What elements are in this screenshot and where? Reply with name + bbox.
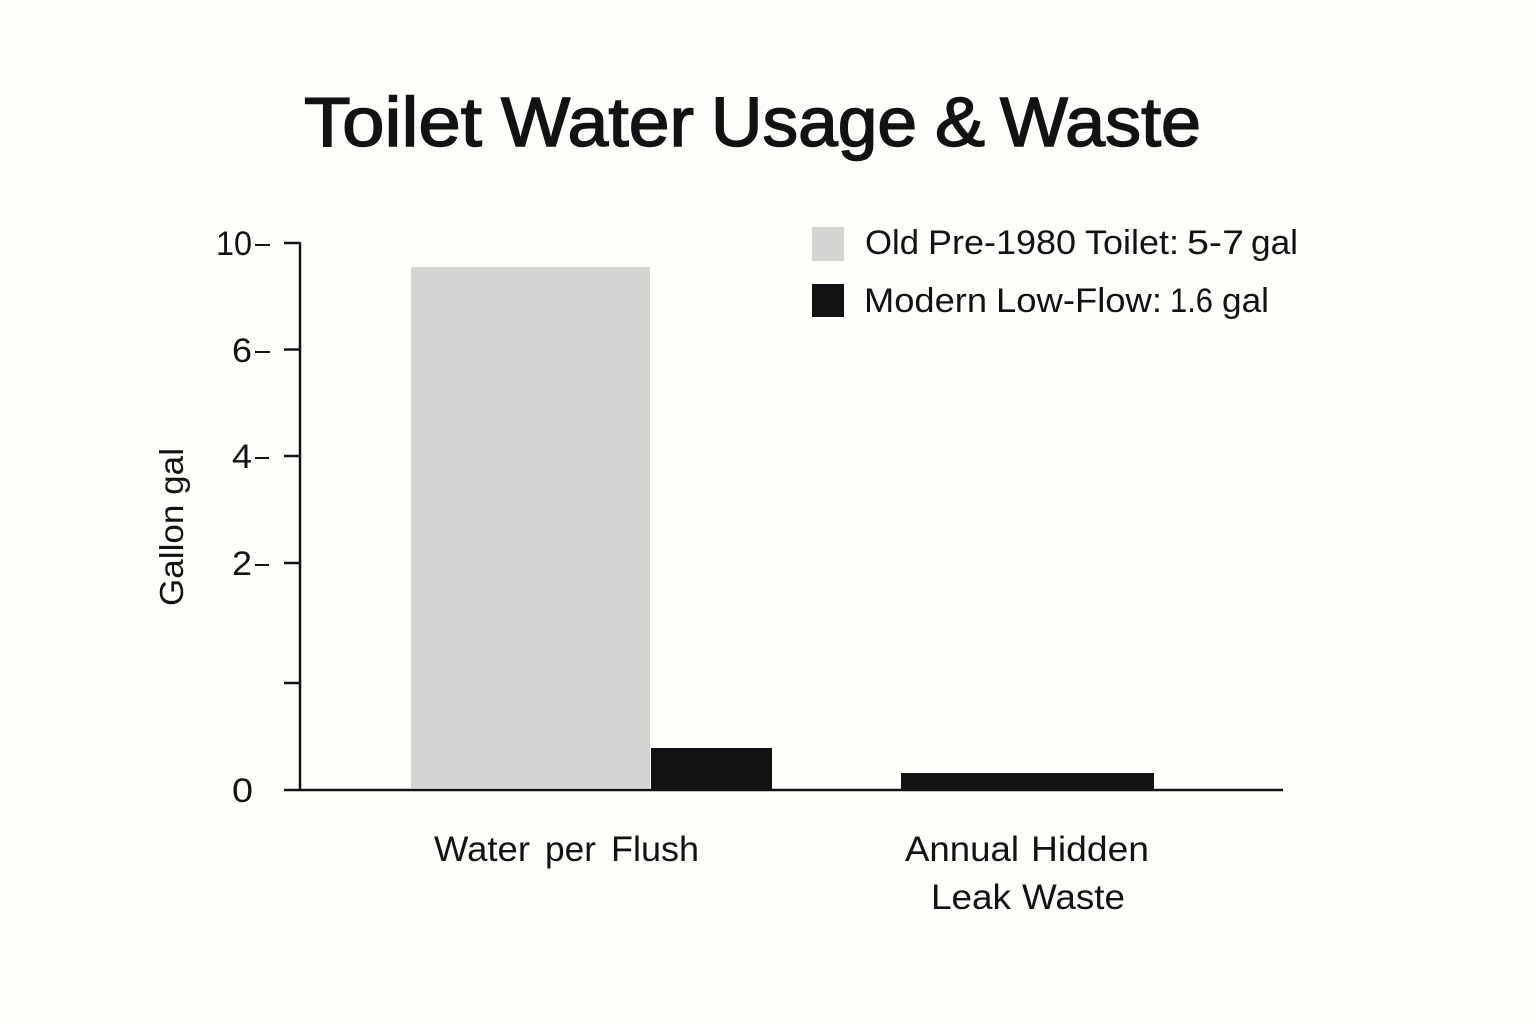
legend label: modern low-flow: gal (1222, 282, 1269, 320)
title: Usage (711, 83, 917, 161)
title: & (935, 83, 985, 161)
x axis category labels: Hidden (1031, 830, 1149, 869)
legend swatch: modern low-flow (812, 284, 844, 317)
legend label: old toilet: Pre-1980 (928, 224, 1076, 262)
title: Toilet (304, 83, 482, 161)
legend label: modern low-flow: 1.6 (1170, 282, 1213, 320)
legend label: modern low-flow (864, 282, 1269, 320)
legend swatch: old toilet (812, 227, 844, 261)
title (304, 83, 1201, 161)
bar chart (216, 225, 1283, 917)
legend label: modern low-flow: Modern (864, 282, 987, 320)
y axis (284, 242, 300, 791)
legend label: old toilet: gal (1251, 224, 1298, 262)
legend label: old toilet: 5-7 (1187, 224, 1244, 262)
title: Waste (1000, 83, 1201, 161)
y axis tick labels: 6 (232, 332, 252, 370)
x axis category labels: per (545, 830, 596, 869)
y axis tick labels (216, 225, 270, 810)
legend (812, 224, 1298, 320)
y axis tick labels: 2 (232, 545, 252, 583)
legend label: modern low-flow: Low-Flow: (996, 282, 1162, 320)
legend label: old toilet: Toilet: (1085, 224, 1179, 262)
x axis category labels: Annual (905, 830, 1019, 869)
y axis label: Gallon gal (153, 448, 190, 606)
bar: old toilet water per flush (411, 267, 650, 788)
legend label: old toilet (865, 224, 1298, 262)
x axis category labels (434, 830, 1149, 917)
x axis category labels: Leak (931, 878, 1012, 917)
legend label: old toilet: Old (865, 224, 919, 262)
y axis tick labels: 10 (216, 225, 252, 263)
y axis tick labels: 0 (232, 772, 253, 810)
bar: modern low-flow water per flush (651, 748, 772, 790)
bar: annual hidden leak waste (901, 773, 1154, 790)
x axis category labels: Water (434, 830, 530, 869)
x axis category labels: Flush (611, 830, 699, 869)
x axis category labels: Waste (1022, 878, 1125, 917)
title: Water (501, 83, 694, 161)
x axis (284, 789, 1283, 791)
y axis tick labels: 4 (232, 438, 252, 476)
